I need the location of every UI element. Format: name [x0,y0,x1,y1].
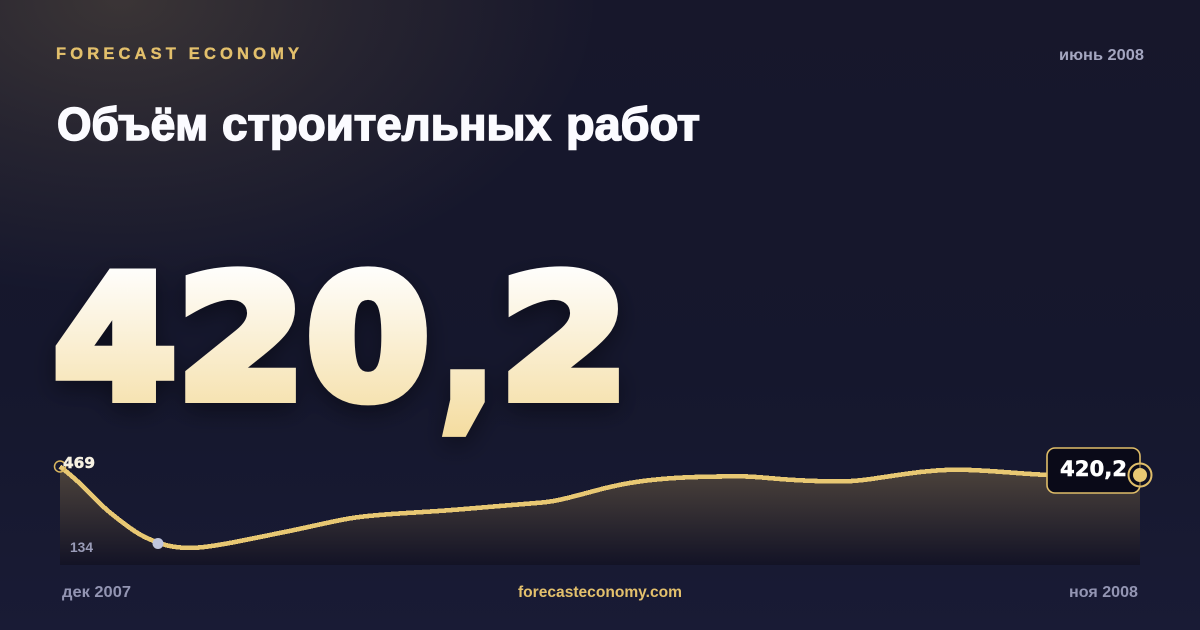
end marker [1128,464,1152,486]
max label: 469 [63,454,95,472]
minimum marker [152,538,164,549]
big value: 0 [307,241,429,437]
title [57,98,700,150]
title: Объём [57,98,208,150]
start date: дек 2007 [62,584,131,601]
big value: 4 [54,241,176,437]
area chart [54,448,1152,565]
chart line [60,466,1140,548]
date label: июнь 2008 [1059,47,1144,64]
current value badge [1047,448,1140,493]
chart area fill [60,466,1140,565]
brand label: FORECAST ECONOMY [56,45,299,63]
big value [54,241,628,447]
big value: 2 [177,241,305,437]
big value: , [441,251,494,447]
site link: forecasteconomy.com [518,584,682,601]
current value badge: 420,2 [1060,457,1127,481]
title: работ [566,98,700,150]
start marker [54,461,66,472]
big value: 2 [500,241,628,437]
title: строительных [222,98,551,150]
min label: 134 [70,539,93,555]
end date: ноя 2008 [1069,584,1138,601]
